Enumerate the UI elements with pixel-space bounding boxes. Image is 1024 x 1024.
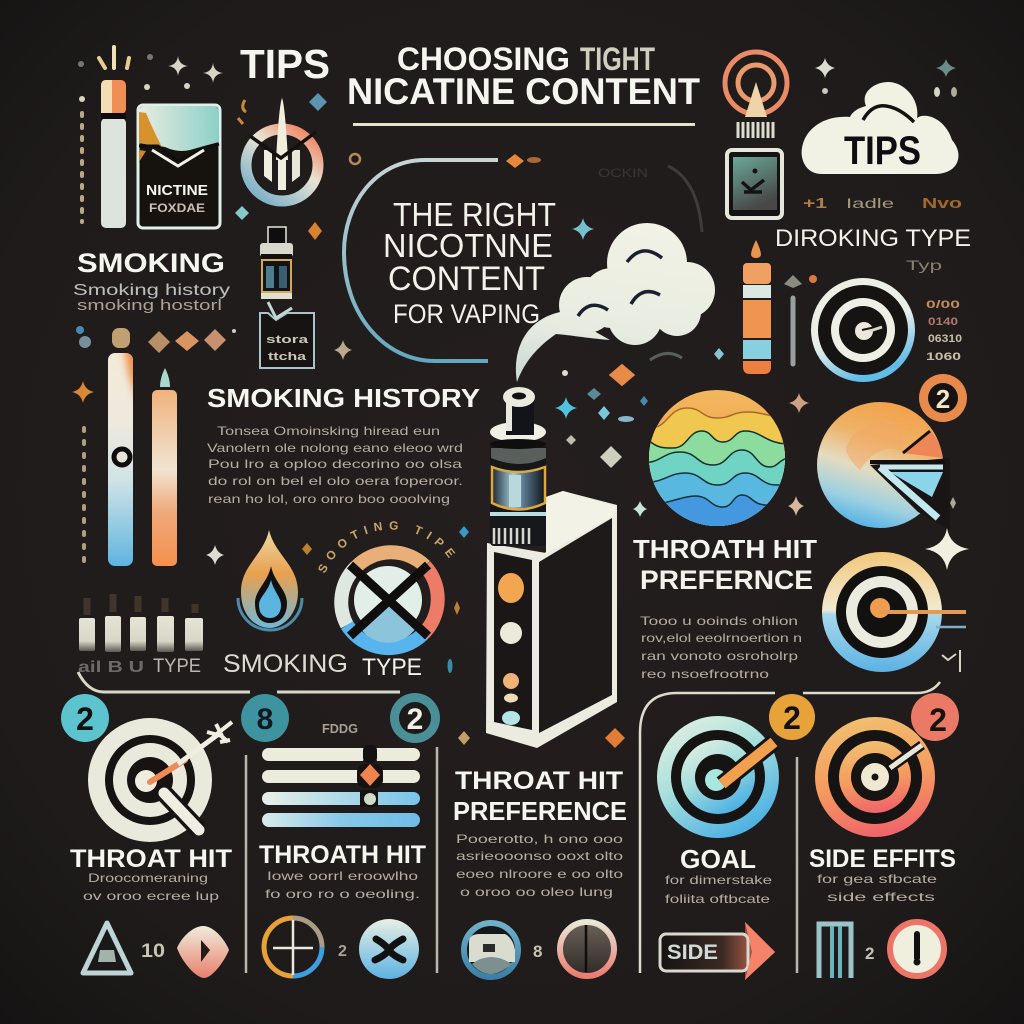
heading: throat hit: THROAT HIT (70, 845, 232, 873)
icon: wave sphere (649, 390, 785, 526)
heading: smoking type (223, 650, 422, 681)
center heading: the right nicotine content: THE RIGHT (393, 196, 556, 233)
badge: 2 teal: 2 (407, 703, 423, 736)
paragraph: throat hit preference (640, 614, 802, 681)
paragraph line 2: rov,elol eeolrnoertion n (641, 631, 802, 645)
title second line: NICATINE CONTENT (347, 71, 700, 112)
top left row of dots (76, 326, 236, 353)
label: type small (78, 656, 201, 677)
paragraph line 5: rean ho lol, oro onro boo ooolving (208, 492, 450, 506)
title word faded: TIGHT (580, 41, 655, 77)
icon: bars columns (819, 924, 851, 978)
label: type: TYPE (153, 656, 201, 677)
badge: pie number: 2 (936, 384, 950, 414)
text line 2: ov oroo ecree lup (83, 889, 219, 903)
paragraph: smoking history (207, 424, 463, 506)
side effects text 2: side effects (827, 890, 935, 904)
dividers (246, 747, 797, 973)
paragraph line 3: eoeo nlroore e oo olto (456, 867, 623, 881)
heading: smoking history: SMOKING HISTORY (207, 383, 480, 413)
faded arc (668, 166, 702, 232)
vape body (486, 491, 617, 748)
heading second line: PREFERNCE (640, 565, 813, 595)
heading: goal: GOAL (680, 844, 756, 874)
icon: lit cigarette (99, 47, 129, 228)
heading: smoking left (73, 248, 230, 314)
small number 2: 2 (338, 943, 347, 960)
faint caption word: Iadle (846, 195, 894, 211)
icon: bottom curved panel (640, 682, 940, 973)
paragraph line 3: ran vonoto osroholrp (641, 649, 798, 663)
title rule (353, 123, 695, 126)
curved label: SOOTING TIPE (318, 521, 456, 573)
faint label: FDDG (322, 721, 358, 736)
heading: smoking type: SMOKING (223, 650, 348, 678)
goal text 2: foliita oftbcate (665, 892, 770, 906)
bracket around center title (344, 160, 498, 361)
sparkle near flame (206, 545, 224, 565)
icon: target right top (811, 278, 915, 382)
icon: blue x disc (359, 919, 419, 979)
center heading line 3: CONTENT (388, 260, 545, 298)
icon: tall gradient cigarette (108, 328, 133, 566)
small number 2 right: 2 (865, 944, 874, 963)
paragraph line 4: do rol on bel el olo oera foperoor. (208, 474, 463, 488)
icon: vapor cloud (516, 223, 715, 382)
number row 3: 06310 (928, 333, 962, 345)
icon: small vape with label (260, 227, 314, 368)
heading: side effects: SIDE EFFITS (809, 845, 956, 873)
vape label text 2: ttcha (268, 351, 307, 363)
heading: throath hit: THROATH HIT (259, 841, 426, 869)
badge: goal: 2 (783, 700, 801, 736)
paragraph: throat hit preference: Tooo u ooinds ohlion (640, 614, 798, 628)
icon: warning disc (890, 922, 944, 976)
center heading line 2: NICOTNNE (383, 227, 553, 264)
icon: triangle (83, 923, 131, 973)
heading: diroking type: DIROKING TYPE (775, 225, 971, 252)
icon: knob disc (560, 922, 614, 976)
icon: pin marker (784, 275, 817, 364)
badge: side effects (911, 693, 959, 741)
numbers column (926, 299, 962, 363)
heading: smoking left: SMOKING (77, 248, 225, 278)
icon: target split (822, 552, 966, 672)
badge: 2 cyan: 2 (76, 701, 94, 737)
badge: 8 teal: 8 (257, 703, 273, 736)
divider: bottom left (78, 672, 400, 692)
icon: target throat hit (88, 718, 232, 842)
icon: side arrow (658, 922, 775, 980)
decorations: top left sparkles (78, 54, 360, 360)
icon: dropper bottle target (725, 52, 787, 218)
arrow label: SIDE (667, 941, 718, 964)
badge: 8 teal (241, 694, 289, 742)
badge: pie number (919, 374, 967, 422)
small number 8: 8 (533, 942, 542, 961)
center heading: the right nicotine content (383, 196, 556, 329)
badge: side effects: 2 (929, 702, 947, 738)
icon: mini cigarette row (79, 594, 203, 652)
icon: crosshair (264, 918, 322, 976)
icon: diamond blob (177, 926, 229, 978)
heading: goal (665, 844, 772, 906)
title (347, 41, 700, 112)
vape tank (490, 387, 546, 546)
heading: throath hit preference: THROATH HIT (633, 534, 817, 564)
decorations: around vape (458, 370, 648, 748)
text line 2: fo oro ro o oeoling. (265, 887, 420, 901)
goal text: for dimerstake (665, 873, 772, 887)
heading: tips top: TIPS (240, 41, 330, 87)
decorations: center top: OCKIN (598, 166, 648, 180)
sparkles around sphere (788, 393, 969, 570)
dotted vertical line top (80, 113, 84, 222)
paragraph: smoking history: Tonsea Omoinsking hiread eun (217, 424, 440, 438)
vape label text: stora (266, 334, 309, 346)
icon: slider bars (262, 745, 420, 827)
text: smoking history line 1: Smoking history (73, 282, 230, 299)
pack sublabel: FOXDAE (149, 201, 205, 215)
paragraph line 4: o oroo oo oleo lung (460, 885, 613, 899)
text line: Droocomeraning (88, 871, 208, 885)
label: type small: ail B U (78, 659, 144, 676)
faint type caption: Typ (906, 257, 942, 273)
dotted line (82, 428, 86, 570)
small number: 10 (141, 941, 165, 962)
numbers column: 0/00 (926, 299, 960, 311)
icon: cigarette pack (138, 105, 220, 228)
heading word: type: TYPE (362, 654, 422, 681)
sparkles near gauge (302, 526, 469, 673)
paragraph line 2: Vanolern ole nolong eano eleoo wrd (207, 441, 463, 455)
icon: cartridge gauge (246, 98, 318, 201)
badge: 2 teal (390, 693, 440, 743)
icon: vape device (486, 387, 617, 748)
icon: target goal (657, 716, 779, 838)
icon: camera disc (464, 923, 518, 977)
icon: flame (238, 530, 302, 630)
decorations: center top (506, 154, 724, 386)
paragraph: preference (456, 832, 623, 899)
heading: throat hit (70, 845, 232, 903)
number row 2: 0140 (928, 316, 958, 328)
center heading line 4: FOR VAPING (393, 299, 540, 329)
side effects text: for gea sfbcate (817, 872, 937, 886)
title: CHOOSING (397, 41, 570, 77)
heading: throath hit preference (633, 534, 817, 595)
icon: tips cloud (802, 82, 958, 174)
paragraph line 2: asrieooonso ooxt olto (456, 849, 623, 863)
icon: target side effects (815, 717, 935, 837)
icon: pie wedge (817, 402, 950, 530)
text line: Iowe oorrl eroowlho (267, 869, 418, 883)
heading: throath hit (259, 841, 426, 901)
paragraph line 3: Pou lro a oploo decorino oo olsa (208, 457, 462, 471)
paragraph: preference: Pooerotto, h ono ooo (456, 832, 623, 846)
pack label: NICTINE (146, 182, 208, 199)
icon: gauge with x (318, 521, 456, 656)
heading: throat hit preference: THROAT HIT (455, 767, 623, 795)
badge: 2 cyan (61, 694, 109, 742)
sparkle left (72, 381, 94, 403)
cloud label: TIPS (844, 129, 921, 173)
number row 4: 1060 (926, 351, 961, 363)
heading: throat hit preference (453, 767, 627, 826)
heading: side effects (809, 845, 956, 904)
paragraph line 4: reo nsoefrootrno (641, 667, 769, 681)
heading second line: PREFERENCE (453, 796, 627, 826)
faint orange caption: +1 (803, 195, 827, 212)
faint caption word 2: Nvo (922, 195, 962, 212)
decorations: right sparkles (815, 58, 957, 97)
text: smoking history line 2: smoking hostorl (77, 297, 222, 314)
badge: goal (769, 694, 815, 740)
icon: tall orange cigarette (152, 368, 177, 566)
icon: striped cigarette right (743, 240, 771, 374)
faint orange caption (803, 195, 962, 212)
